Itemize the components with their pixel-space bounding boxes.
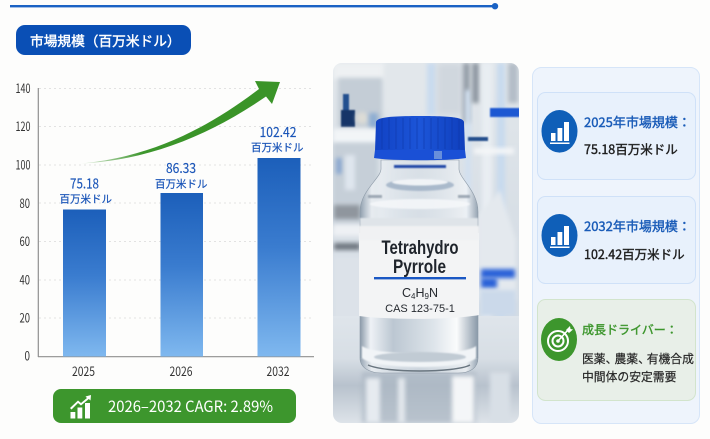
card: growth driver: 医薬、	[582, 350, 617, 367]
bottle label: 4	[411, 292, 416, 301]
bottle label: Tetrahydro	[382, 238, 458, 259]
value label 2026	[155, 157, 208, 192]
bottle label: Pyrrole	[393, 257, 446, 278]
blurred lab background	[333, 63, 519, 316]
value label 2025: 百万米ドル	[60, 192, 112, 206]
value label 2032: 102.42	[260, 121, 296, 141]
CAGR badge: 2026–2032 CAGR: 2.89%	[108, 395, 273, 417]
bottle glass	[360, 160, 478, 373]
bottle label: CAS 123-75-1	[385, 303, 455, 315]
bar chart	[16, 78, 314, 380]
bottle label: N	[429, 286, 438, 300]
card: growth driver: 農薬、	[614, 350, 650, 367]
card: 2025 market size: 2025年市場規模：	[584, 112, 691, 131]
y axis labels: 60	[20, 231, 30, 250]
photo: glass bottle of Tetrahydro Pyrrole in a lab	[333, 63, 520, 423]
bottle label: C	[402, 286, 411, 300]
icon: bar chart	[542, 214, 578, 257]
value label 2032: 百万米ドル	[251, 140, 304, 155]
y axis labels: 120	[16, 116, 31, 135]
y axis labels	[16, 78, 31, 364]
right info panel	[532, 68, 700, 424]
card: 2025 market size: 75.18百万米ドル	[584, 139, 678, 158]
y axis labels: 140	[16, 78, 31, 97]
value label 2025	[60, 172, 112, 206]
card: 2025 market size	[538, 92, 696, 180]
icon: target	[541, 318, 577, 361]
CAGR badge	[53, 389, 296, 423]
x axis labels: 2025	[72, 361, 95, 380]
y axis labels: 20	[20, 308, 30, 326]
card: growth driver: 成長ドライバー：	[582, 321, 678, 338]
growth arrow	[81, 81, 280, 164]
card: growth driver	[538, 300, 696, 400]
icon: rising bars	[70, 395, 91, 418]
value label 2032	[251, 121, 304, 155]
heading: market size: 市場規模（百万米ドル）	[30, 30, 181, 50]
value label 2025: 75.18	[70, 172, 99, 192]
bar 2025	[63, 210, 106, 356]
icon: bar chart	[542, 110, 578, 153]
y axis labels: 0	[24, 346, 30, 364]
reflective lab table	[333, 316, 519, 423]
bottle cap	[374, 116, 466, 160]
value label 2026: 86.33	[166, 157, 196, 177]
y axis labels: 100	[16, 154, 31, 174]
y axis labels: 40	[20, 270, 30, 288]
x axis labels: 2032	[266, 361, 290, 380]
y axis labels: 80	[20, 193, 30, 212]
bottle label: 9	[425, 292, 430, 301]
x axis labels: 2026	[170, 361, 193, 380]
bar 2032	[258, 158, 300, 356]
card: 2032 market size: 2032年市場規模：	[584, 216, 691, 235]
card: 2032 market size: 102.42百万米ドル	[584, 244, 685, 263]
card: growth driver: 中間体の安定需要	[582, 368, 677, 385]
bottle label	[359, 226, 479, 319]
card: growth driver: 有機合成	[647, 350, 694, 367]
chart grid lines and axes	[38, 88, 314, 357]
x axis labels	[72, 361, 290, 380]
bottle label: H	[415, 286, 425, 300]
heading: market size	[16, 25, 191, 55]
card: 2032 market size	[538, 196, 696, 284]
value label 2026: 百万米ドル	[155, 176, 208, 192]
top rule with end dot	[10, 3, 498, 9]
bar 2026	[160, 193, 203, 356]
